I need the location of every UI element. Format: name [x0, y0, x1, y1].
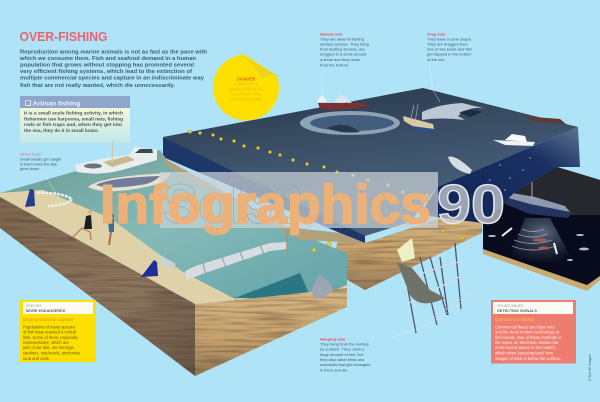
icon: sonar waves: [512, 229, 556, 250]
label: basket nets: [320, 32, 369, 68]
buoy line: [188, 130, 464, 252]
intro text: very efficient fishing systems, which lead to the extinction of: [20, 69, 192, 75]
panel: sound waves: [491, 300, 576, 364]
label: basket nets: dragged in a circle around: [320, 52, 366, 56]
danger sticker: [213, 53, 282, 120]
panel: sound waves: which when bouncing back form: [495, 350, 554, 356]
front sand wall: [195, 288, 347, 376]
label: hanging nets: [320, 336, 370, 372]
label: sinker traps: goes down.: [20, 166, 40, 171]
artisan text: [24, 110, 123, 133]
net catch: [397, 262, 445, 303]
panel: sound waves: and the most modern technology to: [495, 330, 560, 334]
arrows: sonar direction: [502, 228, 557, 254]
label: drag nets: one or two boats and fish: [427, 46, 472, 52]
panel: species more endangered: MORE ENDANGERED: [26, 309, 66, 313]
trawl net: [422, 103, 487, 120]
trawler boat: [403, 104, 434, 132]
panel: sound waves: SOUND WAVES: [497, 304, 524, 308]
label: basket nets: surface species. They hang: [320, 42, 369, 46]
label: hanging nets: large amount of fish, but: [320, 352, 364, 357]
label: drag nets: [427, 32, 472, 62]
panel: species more endangered: representative, which are: [23, 340, 69, 345]
sonar cutaway block: [483, 167, 600, 291]
panel: species more endangered: part of our diet, are herrings,: [23, 345, 75, 350]
intro text: multiple commercial species and capture in an indiscriminate way: [20, 76, 205, 82]
oval boat: [88, 173, 170, 191]
watermark band: [160, 172, 438, 228]
hanging net: [397, 238, 470, 333]
deep step: [235, 273, 312, 300]
label: sinker traps: Sinker traps: [20, 152, 41, 156]
heading: artisan fishing: ❏ Artisan fishing: [25, 99, 80, 107]
label: drag nets: Drag nets: [427, 32, 446, 36]
panel: species more endangered: of fish have reached a critical: [23, 330, 76, 334]
title: OVER-FISHING: [20, 29, 108, 44]
long red ship: [522, 116, 566, 124]
icon: fish shoals: [488, 234, 589, 261]
sand wall of central block: [330, 205, 482, 290]
panel: species more endangered: sardines, mackerels, anchovies,: [23, 350, 81, 356]
danger text: [229, 76, 264, 102]
artisan text: It is a small scale fishing activity, in which: [24, 110, 123, 116]
panel: sound waves: Commercial fleets use huge nets: [495, 324, 555, 330]
label: hanging nets: They hang from the surface: [320, 342, 370, 346]
artisan text: the sea, they do it in small boats.: [24, 128, 99, 133]
danger text: species fished die: [229, 86, 264, 92]
left cliff wall: [0, 197, 195, 376]
label: drag nets: They have a cone shape.: [427, 36, 472, 42]
leader lines: [43, 65, 470, 337]
label: basket nets: from the bottom.: [320, 62, 349, 68]
red fish: [533, 238, 550, 250]
label: hanging nets: they also catch birds and: [320, 357, 364, 362]
label: sinker traps: in them when the tide: [20, 161, 57, 166]
surface net and ship: [300, 94, 400, 135]
intro text: which we consume them. Fish and seafood demand in a human: [19, 56, 197, 62]
label: drag nets: They are dragged from: [427, 42, 468, 46]
panel: species more endangered: Disproportionate capture: [23, 317, 74, 322]
danger text: recovering phase: [230, 96, 263, 102]
panel: species more endangered: Populations of many species: [23, 324, 75, 330]
label: hanging nets: as curtains. They catch a: [320, 346, 365, 352]
watermark ghost: Sol90: [163, 172, 303, 235]
panel: species more endangered: tuna and cods.: [23, 356, 50, 361]
danger text: A 25% of the: [234, 82, 259, 86]
drift net shape: [448, 157, 472, 174]
label: drag nets: get trapped in the bottom: [427, 52, 472, 56]
panel: sound waves: find shoals. One of these methods is: [495, 335, 561, 340]
rock weight: [312, 275, 332, 298]
sonar ship: [503, 178, 572, 218]
panel: sound waves: DETECTING SIGNALS: [497, 309, 537, 313]
panel: sound waves: images of what is below the surface.: [495, 356, 561, 361]
panel: species more endangered: SPECIES: [26, 304, 42, 308]
beach block top: water: [0, 150, 347, 300]
intro text: fish that are not really wanted, which die unnecessarily.: [20, 83, 175, 89]
panel: sound waves: the sonar, an electronic device that: [495, 340, 559, 345]
label: hanging nets: mammals that get entangled: [320, 362, 370, 367]
artisan text: rods or fish traps and, when they get into: [24, 122, 122, 127]
bank strip: [160, 157, 365, 243]
intro text: population that grows without stopping has promoted several: [20, 62, 194, 68]
label: basket nets: They are ideal for fishing: [320, 36, 364, 42]
label: hanging nets: Hanging nets: [320, 336, 346, 342]
label: basket nets: Basket nets: [320, 32, 343, 36]
beach sand: [0, 190, 347, 304]
fishermen: [25, 189, 176, 277]
watermark: 90: [437, 173, 505, 235]
label: sinker traps: [20, 152, 62, 171]
credit: © Sol 90 Images: [588, 354, 592, 381]
watermark: Infographics: [100, 173, 431, 235]
artisan text: fishermen use harpoons, small nets, fishing: [24, 116, 123, 122]
danger text: DANGER: [237, 76, 256, 82]
panel: artisan fishing: [20, 96, 130, 143]
sonar beam: [510, 218, 575, 265]
plankton dots: [489, 157, 531, 191]
intro text: Reproduction among marine animals is not as fast as the pace with: [20, 50, 208, 56]
label: basket nets: a shoal and they close: [320, 57, 361, 62]
funnel net: [185, 231, 287, 280]
label: hanging nets: in them and die.: [320, 368, 348, 372]
panel: sound waves: Commercial fishing: [495, 317, 535, 322]
intro text: [19, 50, 208, 89]
blue front of sea: [163, 137, 365, 243]
label: sinker traps: Small shoals get caught: [20, 156, 62, 162]
fishing boat: [75, 140, 157, 174]
label: basket nets: from floating devices, are: [320, 46, 365, 52]
danger text: out or are in the: [231, 92, 262, 96]
panel: sound waves: emits sound waves to the bottom,: [495, 345, 556, 350]
panel: species more endangered: [20, 300, 96, 362]
deep blue wall: [420, 127, 580, 223]
label: drag nets: of the net.: [427, 57, 445, 62]
panel: species more endangered: limit. Some of them, especially: [23, 335, 79, 340]
open sea surface: [163, 88, 578, 236]
net float: [397, 238, 415, 262]
white ship: [493, 134, 535, 146]
